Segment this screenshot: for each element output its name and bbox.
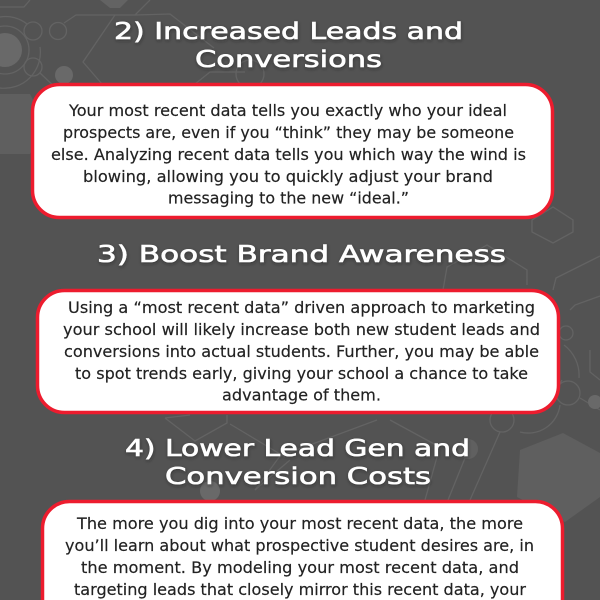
heading: 2) Increased Leads and Conversions — [114, 19, 463, 73]
panel: increased leads text card: prospects are, even if you “think” they may be someone — [63, 123, 514, 142]
panel: brand awareness text card: advantage of them. — [222, 386, 381, 404]
heading: 3) Boost Brand Awareness: 3) Boost Brand Awareness — [97, 242, 506, 268]
panel: brand awareness text card — [38, 290, 558, 412]
heading: 2) Increased Leads and Conversions: 2) Increased Leads and — [114, 19, 463, 45]
panel: lower costs text card: targeting leads that closely mirror this recent data, your — [74, 580, 526, 599]
panel: increased leads text card: Your most recent data tells you exactly who your ideal — [68, 101, 507, 120]
panel: lower costs text card: The more you dig into your most recent data, the more — [76, 514, 523, 533]
panel: brand awareness text card: conversions into actual students. Further, you may be able — [64, 342, 539, 361]
heading: 4) Lower Lead Gen and Conversion Costs: 4) Lower Lead Gen and — [125, 436, 470, 462]
heading: 4) Lower Lead Gen and Conversion Costs: Conversion Costs — [165, 464, 431, 490]
panel: increased leads text card: messaging to the new “ideal.” — [168, 188, 409, 208]
panel: increased leads text card — [32, 84, 552, 218]
panel: brand awareness text card: your school will likely increase both new student leads and — [63, 320, 540, 339]
heading: 4) Lower Lead Gen and Conversion Costs — [125, 436, 470, 490]
panel: increased leads text card: else. Analyzing recent data tells you which way the wind is — [51, 145, 526, 164]
panel: brand awareness text card: Using a “most recent data” driven approach to marketing — [68, 298, 535, 317]
panel: lower costs text card: you’ll learn about what prospective student desires are, in — [65, 536, 534, 555]
panel: lower costs text card — [42, 502, 562, 600]
panel: increased leads text card: blowing, allowing you to quickly adjust your brand — [83, 167, 493, 186]
panel: lower costs text card: the moment. By modeling your most recent data, and — [81, 558, 519, 577]
heading: 2) Increased Leads and Conversions: Conversions — [195, 47, 382, 73]
panel: brand awareness text card: to spot trends early, giving your school a chance to take — [75, 364, 528, 383]
